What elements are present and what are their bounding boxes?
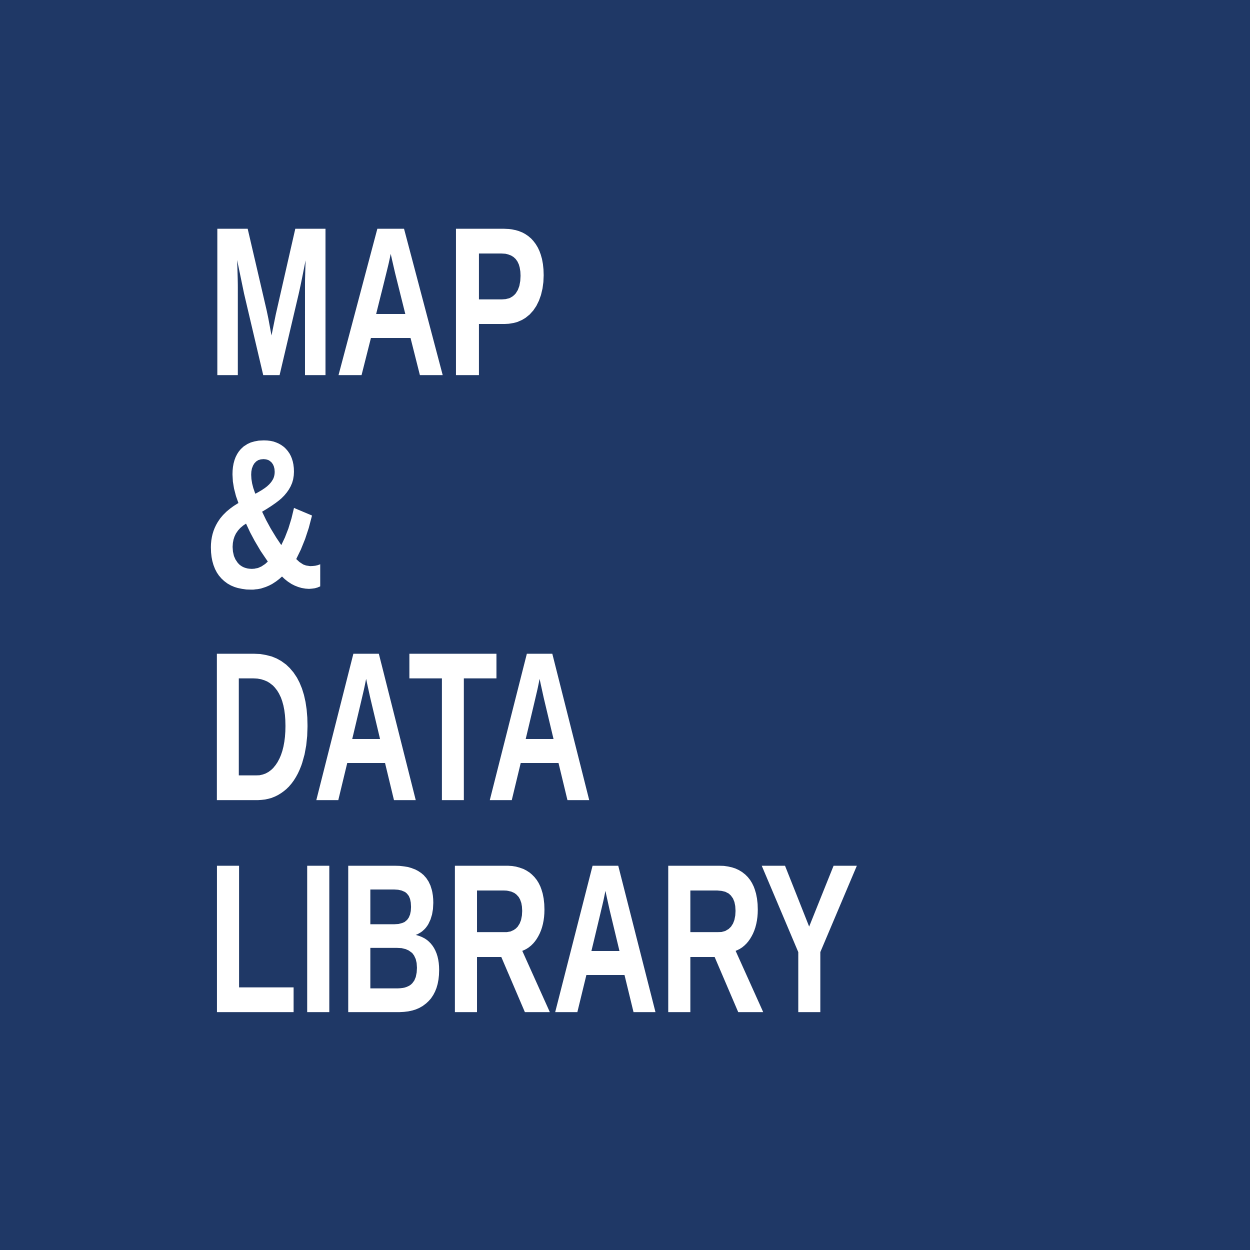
title: Map & Data Library xyxy=(204,184,858,1056)
title line: DATA: DATA xyxy=(208,608,592,844)
title line: ampersand: & xyxy=(204,396,325,632)
title line: LIBRARY: LIBRARY xyxy=(208,820,858,1056)
title line: MAP: MAP xyxy=(208,184,548,420)
